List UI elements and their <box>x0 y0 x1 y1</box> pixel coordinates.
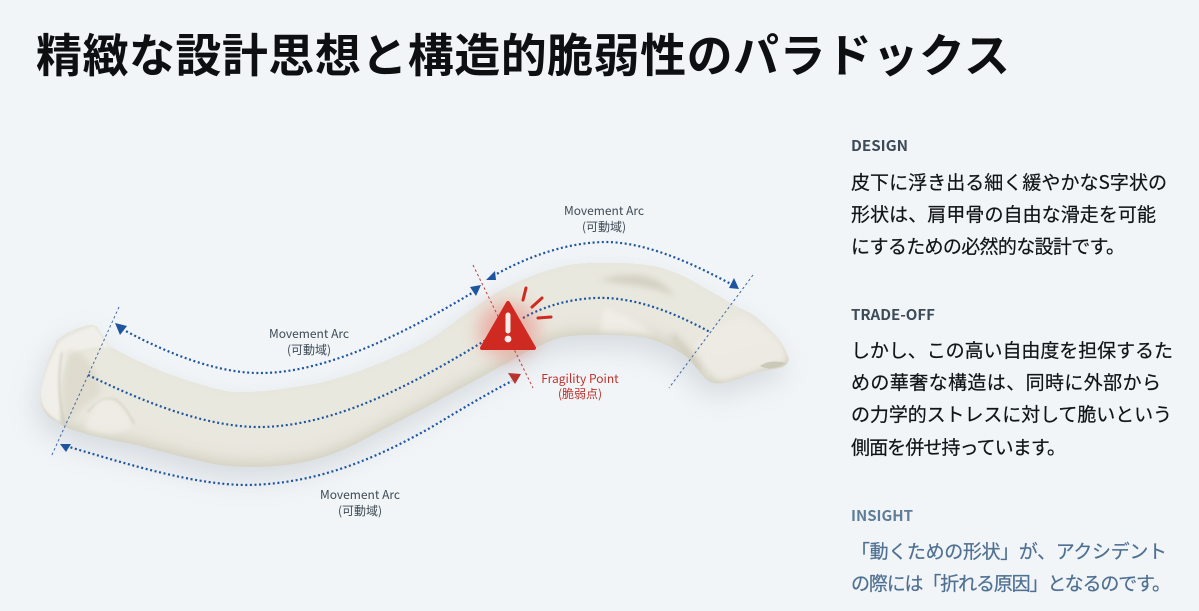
fragility boundary line <box>473 265 533 388</box>
label: movement arc top: Movement Arc <box>564 202 644 219</box>
label: movement arc left: (可動域) <box>287 341 331 358</box>
label: movement arc bottom: (可動域) <box>338 502 382 519</box>
movement arc: lower <box>60 373 521 485</box>
section: insight: INSIGHT <box>851 505 913 526</box>
section: design: 皮下に浮き出る細く緩やかなS字状の <box>851 168 1167 195</box>
section: trade-off <box>851 304 1173 460</box>
movement arc: upper right <box>486 242 739 289</box>
right boundary line <box>669 275 753 388</box>
label: movement arc top <box>564 202 644 235</box>
label: fragility point <box>541 370 619 402</box>
section: trade-off: TRADE-OFF <box>851 304 935 325</box>
section: insight: 「動くための形状」が、アクシデント <box>851 537 1167 564</box>
left boundary line <box>51 307 119 457</box>
section: trade-off: めの華奢な構造は、同時に外部から <box>851 368 1161 395</box>
section: trade-off: しかし、この高い自由度を担保するた <box>851 336 1173 363</box>
label: movement arc top: (可動域) <box>582 218 626 235</box>
section: design: にするための必然的な設計です。 <box>851 232 1125 259</box>
section: design: 形状は、肩甲骨の自由な滑走を可能 <box>851 200 1156 227</box>
section: insight: の際には「折れる原因」となるのです。 <box>851 569 1171 596</box>
movement arc: centre line through bone <box>88 298 710 427</box>
clavicle bone illustration <box>30 247 800 480</box>
label: movement arc left: Movement Arc <box>269 325 349 342</box>
section: trade-off: 側面を併せ持っています。 <box>851 433 1066 460</box>
movement arc: upper left <box>115 285 481 373</box>
section: design: DESIGN <box>851 135 908 156</box>
label: movement arc left <box>269 325 349 358</box>
section: insight <box>851 505 1171 596</box>
section: trade-off: の力学的ストレスに対して脆いという <box>851 400 1172 427</box>
label: movement arc bottom <box>320 486 400 519</box>
icon: warning triangle <box>478 288 551 358</box>
label: fragility point: (脆弱点) <box>558 385 602 402</box>
title: 精緻な設計思想と構造的脆弱性のパラドックス <box>36 20 1010 86</box>
label: movement arc bottom: Movement Arc <box>320 486 400 503</box>
label: fragility point: Fragility Point <box>541 370 619 387</box>
section: design <box>851 135 1167 259</box>
